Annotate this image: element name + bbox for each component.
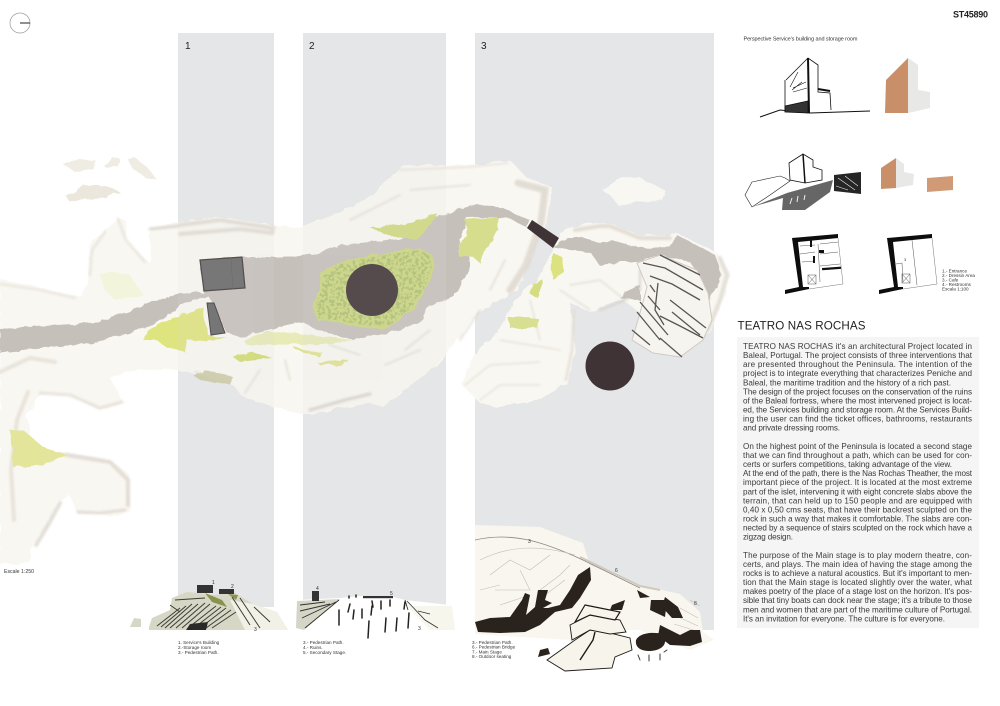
plan legend: 2.- Dressin Area	[942, 273, 975, 278]
description paragraph 3	[743, 551, 973, 623]
scale label: Escale 1:250	[4, 569, 34, 575]
section 1 drawing: 2	[231, 584, 234, 590]
section 1 drawing	[130, 580, 288, 633]
description paragraph 3: sible that tiny boats can dock near the stage; it's a tribute to those	[743, 596, 972, 605]
description paragraph 3: rocks is to achieve a natural acoustics. But it's important to men-	[743, 569, 972, 578]
section 2 legend: 4.- Ruins.	[303, 645, 323, 650]
panel: section band 2: 2	[309, 41, 315, 52]
section 3 drawing: 6	[615, 568, 618, 574]
panel: section band 3	[475, 33, 714, 630]
description paragraph 1: and private dressing rooms.	[743, 424, 840, 433]
title: TEATRO NAS ROCHAS	[738, 320, 866, 332]
description paragraph 1: ed, the Services building and storage room. At the Services Build-	[743, 406, 972, 415]
north compass icon	[10, 13, 30, 33]
description paragraph 2: zigzag design.	[743, 533, 793, 542]
description paragraph 3: men and women that are part of the maritime culture of Portugal.	[743, 605, 972, 614]
section 2 drawing: 5	[390, 591, 393, 597]
description paragraph 1: Baleal, the maritime tradition and the history of a rich past.	[743, 378, 951, 387]
theatre slabs	[632, 255, 712, 357]
section 1 legend: 3.- Pedestrian Path.	[178, 650, 219, 655]
section 1 legend: 1. Service's Building	[178, 640, 220, 645]
rocky land masses	[0, 157, 730, 565]
section 3 legend: 8.- Outdoor seating	[472, 654, 512, 659]
panel: section band 1: 1	[185, 41, 191, 52]
description paragraph 2: important piece of the project. It is located at the most extreme	[743, 478, 972, 487]
perspective caption: Perspective Service's building and storage room	[744, 36, 858, 42]
pedestrian bridge	[527, 220, 559, 248]
section 3 legend: 7.- Main Stage	[472, 649, 502, 654]
description paragraph 1: are presented throughout the Peninsula. The intention of the	[743, 360, 972, 369]
plan legend: 1.- Entrance	[942, 268, 967, 274]
panel: section band 2	[303, 33, 446, 607]
description paragraph 1: TEATRO NAS ROCHAS it's an architectural Project located in	[743, 342, 972, 351]
description paragraph 2: that we can find throughout a path, which can be used for con-	[743, 451, 972, 460]
description paragraph 2: rock in such a way that makes it comfortable. The slabs are con-	[743, 514, 972, 524]
plan legend: 4.- Restrooms	[942, 282, 972, 287]
section 1 drawing: 1	[212, 580, 215, 586]
description paragraph 2: 0,40 x 0,50 cms seats, that have their backrest sculpted on the	[743, 505, 972, 514]
description paragraph 1	[743, 342, 973, 433]
vegetation texture	[315, 250, 432, 326]
floor plan: ground level	[785, 234, 843, 294]
section 1 drawing: 3	[254, 627, 257, 633]
section 2 legend	[303, 640, 346, 655]
description paragraph 2: part of the islet, intervening it with eight concrete slabs above the	[743, 487, 972, 496]
description paragraph 2: certs or surfers competitions, taking advantage of the view.	[743, 460, 952, 469]
stage circle, secondary stage	[346, 264, 398, 316]
section 3 legend: 6.- Pedestrian Bridge	[472, 645, 516, 650]
rock shading	[0, 163, 727, 545]
section 3 drawing	[475, 525, 714, 671]
boulders	[547, 605, 632, 671]
pedestrian path	[0, 204, 722, 353]
section 1 legend	[178, 640, 220, 655]
description paragraph 3: makes poetry of the place of a stage lost on the horizon. It's pos-	[743, 587, 972, 596]
section 2 legend: 5.- Secondary Stage.	[303, 650, 346, 655]
description paragraph 2: nected by a sequence of stairs sculpted on the rock which have a	[743, 524, 972, 533]
panel: section band 1	[178, 33, 274, 607]
section 2 legend: 3.- Pedestrian Path.	[303, 640, 344, 645]
panel: section band 3: 3	[481, 41, 487, 52]
panel: project description	[737, 337, 979, 628]
render: copper building	[885, 58, 930, 113]
description paragraph 1: ing the user can find the ticket offices, bathrooms, restaurants	[743, 415, 972, 424]
description paragraph 3: It's an invitation for everyone. The culture is for everyone.	[743, 614, 945, 623]
description paragraph 3: The purpose of the Main stage is to play modern theatre, con-	[743, 551, 972, 560]
sketch: building and plaza	[745, 154, 861, 210]
plan legend: 3.- Cafe	[942, 278, 959, 282]
vegetation patches	[10, 214, 565, 467]
description paragraph 1: Baleal, Portugal. The project consists of three interventions that	[743, 351, 973, 360]
description paragraph 3: tion that the Main stage is located slightly over the water, what	[743, 578, 973, 587]
stage circle, main stage	[586, 342, 634, 390]
section 2 drawing: 4	[316, 586, 319, 592]
band tint over land	[178, 214, 437, 366]
description paragraph 2: terrain, that can held up to 150 people and are equipped with	[743, 496, 972, 505]
description paragraph 1: of the Baleal fortress, where the most intervened project is locat-	[743, 396, 972, 406]
project code: ST45890	[953, 10, 988, 20]
plan legend	[942, 268, 975, 292]
section 3 legend	[472, 640, 516, 659]
render: building and storage room	[881, 158, 953, 192]
description paragraph 1: The design of the project focuses on the conservation of the ruins	[743, 387, 972, 396]
description paragraph 2: At the end of the path, there is the Nas Rochas Theather, the most	[743, 469, 973, 478]
floor plan: upper level: 3	[904, 257, 907, 262]
plan legend: Escala 1:100	[942, 286, 969, 292]
site plan map	[0, 157, 730, 565]
description paragraph 2	[743, 442, 973, 542]
section 2 drawing	[296, 586, 455, 638]
service building	[200, 257, 245, 291]
shoreline black masses	[475, 567, 702, 657]
storage room	[207, 303, 225, 335]
section 3 drawing: 8	[694, 601, 697, 607]
description paragraph 3: certs, and plays. The main idea of having the stage among the	[743, 560, 972, 569]
section 3 drawing: 3	[528, 539, 531, 545]
section 1 legend: 2.-Storage room	[178, 645, 211, 650]
floor plan: upper level	[879, 234, 937, 294]
description paragraph 1: project is to integrate everything that characterizes Peniche and	[743, 369, 972, 378]
sketch: services building	[760, 58, 870, 117]
section 2 drawing: 3	[418, 626, 421, 632]
description paragraph 2: On the highest point of the Peninsula is located a second stage	[743, 442, 972, 451]
section 3 legend: 3.- Pedestrian Path.	[472, 640, 513, 645]
